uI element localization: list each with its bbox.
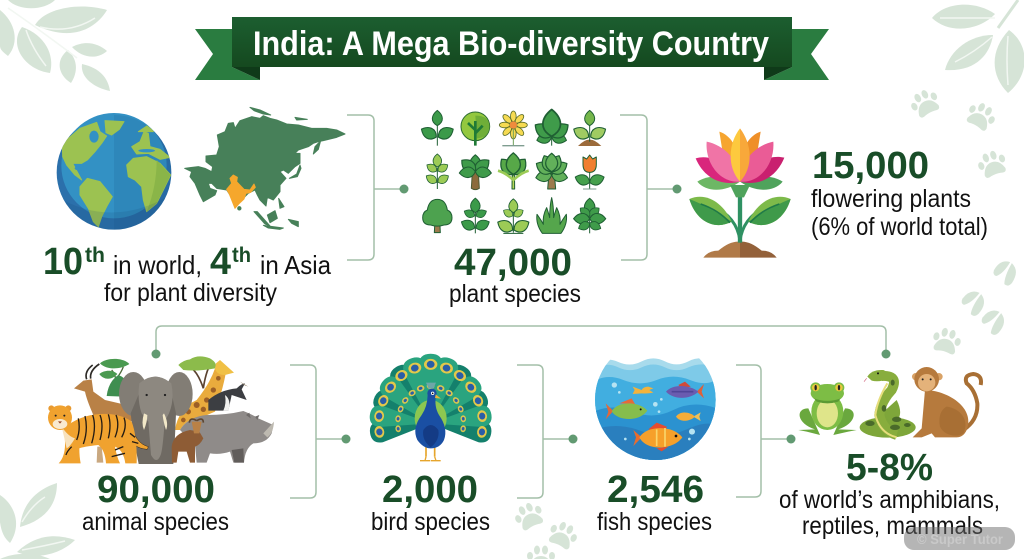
stat: world rank: th (232, 244, 251, 267)
stat: world rank: 4 (210, 241, 231, 283)
stat: world rank: th (85, 244, 105, 267)
elephant (119, 372, 193, 464)
icon: globe (57, 113, 173, 233)
trees behind animals (99, 356, 216, 397)
icon: peacock (368, 354, 493, 461)
goat (172, 419, 203, 463)
stat: amphibians, reptiles, mammals: of world’s amphibians, (779, 486, 1000, 514)
frog (798, 382, 857, 435)
icon grid: plant species (419, 109, 608, 235)
stat: fish species: fish species (597, 508, 712, 536)
watermark (904, 527, 1015, 550)
stat: world rank: in Asia (260, 250, 331, 280)
stat: flowering plants (811, 145, 988, 241)
decorative leaves: top left (0, 0, 110, 91)
decorative animal tracks (511, 86, 1021, 559)
title banner (195, 17, 829, 80)
connector lines (152, 115, 890, 498)
stat: flowering plants: (6% of world total) (811, 213, 988, 241)
stat: animal species: animal species (82, 508, 229, 536)
icon: fish bowl (593, 358, 717, 462)
bird (208, 382, 248, 411)
plant icon row 3 (423, 198, 606, 235)
stat: bird species: bird species (371, 508, 490, 536)
stat: amphibians, reptiles, mammals: 5-8% (846, 447, 933, 489)
stat: world rank: 10 (43, 241, 83, 283)
decorative leaves: top right (932, 0, 1024, 93)
stat: amphibians, reptiles, mammals: reptiles, mammals (802, 512, 983, 540)
stat: flowering plants: 15,000 (812, 145, 929, 187)
stat: amphibians, reptiles, mammals (779, 447, 1000, 540)
stat: bird species (371, 469, 490, 536)
plant icon row 2 (424, 153, 606, 190)
stat: world rank (43, 241, 331, 307)
stat: fish species: 2,546 (607, 469, 704, 511)
plant icon row 1 (419, 109, 608, 146)
stat: plant species (449, 242, 581, 308)
stat: animal species: 90,000 (97, 469, 215, 511)
antelope (74, 364, 135, 463)
rhino (180, 411, 274, 463)
stat: animal species (82, 469, 229, 536)
icon: Asia map with India highlighted (185, 107, 345, 229)
monkey (912, 367, 981, 437)
stat: world rank: in world, (113, 250, 202, 280)
stat: fish species (597, 469, 712, 536)
decorative leaves: bottom left (0, 483, 75, 559)
title text: India: A Mega Bio-diversity Country (253, 25, 769, 63)
snake (860, 370, 916, 438)
icon: frog, snake and monkey (798, 367, 981, 438)
stat: flowering plants: flowering plants (811, 185, 971, 213)
stat: bird species: 2,000 (382, 469, 478, 511)
giraffe (175, 360, 234, 430)
icon: group of animals (48, 356, 274, 464)
watermark: © Super Tutor (917, 531, 1004, 547)
stat: plant species: 47,000 (454, 242, 572, 284)
stat: plant species: plant species (449, 280, 581, 308)
stat: world rank: for plant diversity (104, 279, 277, 307)
icon: lotus flower (689, 128, 791, 258)
tiger (48, 405, 148, 463)
